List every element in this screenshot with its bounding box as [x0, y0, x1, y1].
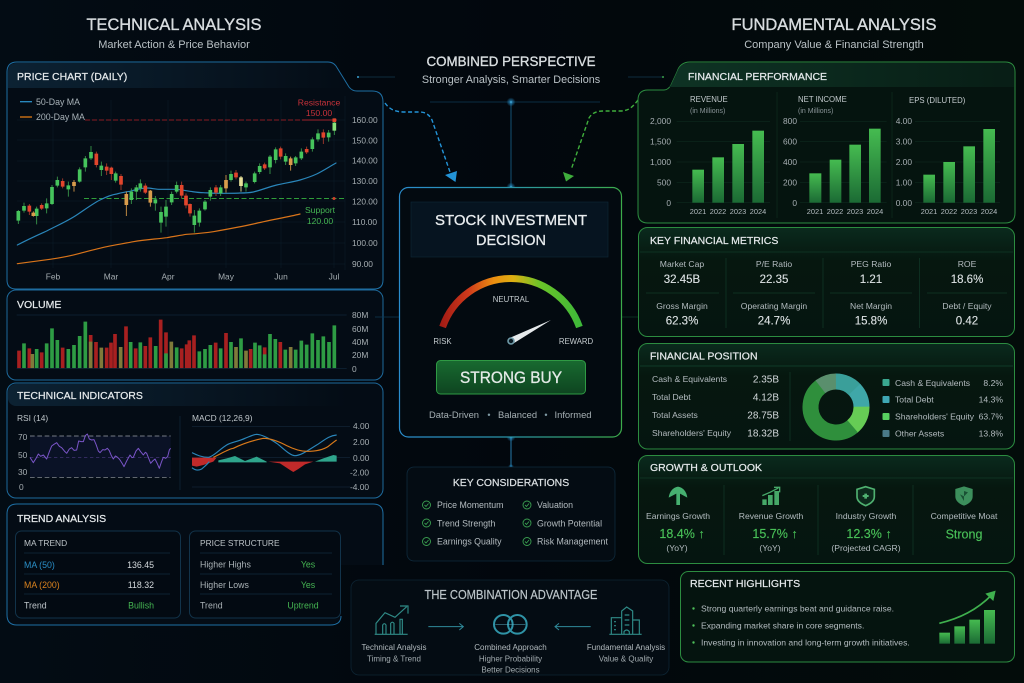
- y axis labels: 100.00: [352, 238, 378, 248]
- rsi chart: 0: [19, 482, 24, 492]
- macd chart: -4.00: [350, 482, 369, 492]
- icon: technical analysis: [375, 606, 408, 634]
- chart: revenue: REVENUE: [690, 95, 728, 104]
- chart: net income: 200: [783, 178, 797, 188]
- panel: key financial metrics: [638, 228, 1014, 336]
- arrow: fundamental to decision: [563, 100, 638, 182]
- metric: earnings growth: Earnings Growth: [646, 511, 710, 521]
- table: ma trend: MA (200): [24, 580, 60, 590]
- chart: eps: EPS (DILUTED): [909, 96, 966, 105]
- metric: industry growth: (Projected CAGR): [831, 543, 901, 553]
- table: ma trend: [16, 531, 180, 618]
- panel: financial performance: [638, 62, 1015, 223]
- balance table: [652, 372, 790, 441]
- macd chart: MACD (12,26,9): [192, 413, 253, 423]
- balance table: 28.75B: [747, 410, 779, 422]
- metrics grid: Market Cap: [660, 259, 704, 269]
- captions: Combined Approach: [474, 643, 547, 652]
- metric: revenue growth: Revenue Growth: [739, 511, 803, 521]
- captions: [362, 643, 665, 674]
- arrow: technical to decision: [385, 103, 457, 182]
- metrics grid: [656, 259, 992, 328]
- x axis labels: [46, 272, 339, 282]
- resistance line: Resistance: [298, 98, 340, 108]
- metric: industry growth: [831, 511, 901, 553]
- macd chart: 0.00: [353, 453, 370, 463]
- heading: recent highlights: RECENT HIGHLIGHTS: [690, 578, 800, 590]
- metric: industry growth: 12.3% ↑: [846, 527, 892, 541]
- captions: Better Decisions: [481, 666, 540, 674]
- title: technical analysis: [86, 15, 262, 51]
- metrics grid: 0.42: [956, 316, 978, 328]
- metric: revenue growth: (YoY): [759, 543, 781, 553]
- chart: net income: 600: [783, 136, 797, 146]
- icon: earnings growth: [669, 487, 687, 505]
- icon: growth bars and arrow: [939, 591, 996, 644]
- macd chart: 2.00: [353, 437, 370, 447]
- x axis labels: Jul: [329, 272, 339, 282]
- support line: Support: [305, 205, 336, 215]
- donut legend: Cash & Equivalents: [895, 378, 970, 388]
- metric: competitive moat: Competitive Moat: [931, 511, 998, 521]
- macd chart: 4.00: [353, 421, 370, 431]
- table: price structure: [190, 531, 340, 618]
- captions: Value & Quality: [599, 654, 653, 664]
- y axis labels: 160.00: [352, 115, 378, 125]
- metrics grid: Gross Margin: [656, 301, 708, 311]
- chart: revenue: 0: [666, 198, 671, 208]
- metrics grid: 62.3%: [666, 316, 698, 328]
- arrow: fundamental to combined: [555, 623, 591, 630]
- chart: revenue: 2022: [710, 207, 726, 216]
- panel: growth and outlook: [638, 456, 1014, 564]
- gauge: [433, 279, 594, 346]
- tagline: [429, 409, 592, 420]
- resistance line: 150.00: [306, 108, 332, 118]
- icon: fundamental analysis: [609, 607, 642, 634]
- balance table: Cash & Equivalents: [652, 374, 727, 384]
- legend: 50-Day MA: [36, 97, 80, 107]
- chart: eps: 4.00: [896, 116, 912, 126]
- volume axis: 80M: [352, 310, 368, 320]
- captions: Fundamental Analysis: [587, 643, 665, 652]
- metrics grid: Debt / Equity: [942, 301, 992, 311]
- donut legend: 14.3%: [979, 394, 1003, 404]
- y axis labels: 140.00: [352, 156, 378, 166]
- x axis labels: Feb: [46, 272, 61, 282]
- chart: revenue: (in Millions): [690, 108, 725, 115]
- table: price structure: Higher Lows: [200, 580, 249, 590]
- panel: the combination advantage: [351, 580, 669, 675]
- bullet list: [692, 604, 910, 648]
- heading: growth and outlook: GROWTH & OUTLOOK: [650, 462, 762, 474]
- balance table: 4.12B: [753, 392, 779, 404]
- metrics grid: PEG Ratio: [851, 259, 892, 269]
- y axis labels: 120.00: [352, 196, 378, 206]
- heading: stock investment decision: DECISION: [476, 232, 546, 249]
- title: technical analysis: TECHNICAL ANALYSIS: [86, 15, 262, 34]
- checklist: Valuation: [537, 500, 573, 510]
- captions: Technical Analysis: [362, 643, 426, 652]
- checklist: Earnings Quality: [437, 536, 502, 546]
- chart: revenue: 2023: [730, 207, 746, 216]
- heading: price chart: PRICE CHART (DAILY): [17, 71, 127, 83]
- rsi chart: 70: [18, 432, 28, 442]
- panel: trend analysis: [7, 504, 383, 625]
- volume axis: [352, 310, 368, 374]
- table: price structure: Yes: [301, 560, 316, 570]
- heading: volume: VOLUME: [17, 299, 61, 311]
- table: price structure: Trend: [200, 600, 223, 610]
- chart: net income: 2024: [867, 207, 883, 216]
- x axis labels: Apr: [161, 272, 175, 282]
- volume axis: 0: [352, 364, 357, 374]
- panel: recent highlights: [680, 572, 1014, 662]
- table: ma trend: Bullish: [128, 600, 154, 610]
- balance table: 18.32B: [747, 428, 779, 440]
- center connectors: [357, 76, 664, 470]
- metric: competitive moat: [931, 511, 998, 542]
- chart: eps: [896, 96, 1000, 216]
- chart grid: [17, 96, 345, 270]
- title: fundamental analysis: Company Value & Financial Strength: [744, 39, 924, 51]
- volume axis: 20M: [352, 350, 368, 360]
- checklist: Growth Potential: [537, 518, 602, 528]
- chart: eps: 0.00: [896, 198, 912, 208]
- metrics grid: 1.21: [860, 274, 882, 286]
- bullet list: Investing in innovation and long-term growth initiatives.: [701, 638, 910, 648]
- panel: financial position: [638, 344, 1014, 449]
- metric: competitive moat: Strong: [946, 528, 982, 542]
- heading: key financial metrics: KEY FINANCIAL METRICS: [650, 235, 778, 247]
- donut legend: Shareholders' Equity: [895, 412, 975, 422]
- icon: competitive moat: [955, 486, 973, 506]
- table: price structure: Uptrend: [287, 600, 319, 610]
- bullet list: Expanding market share in core segments.: [701, 620, 864, 630]
- chart: eps: 2021: [921, 207, 937, 216]
- captions: Higher Probability: [479, 654, 542, 664]
- title: combined perspective: Stronger Analysis, Smarter Decisions: [422, 74, 601, 86]
- heading: stock investment decision: [411, 202, 608, 257]
- button: strong buy: STRONG BUY: [460, 369, 562, 387]
- metric: earnings growth: [646, 511, 710, 553]
- checklist: Risk Management: [537, 536, 608, 546]
- chart: net income: 2022: [827, 207, 843, 216]
- metrics grid: ROE: [958, 259, 977, 269]
- panel: stock investment decision: [400, 188, 622, 437]
- donut legend: [882, 378, 1003, 438]
- title: technical analysis: Market Action & Price Behavior: [98, 39, 250, 51]
- gauge: RISK: [433, 337, 452, 346]
- candlesticks: [18, 118, 334, 233]
- rsi chart: [17, 413, 171, 492]
- icon: combined approach: [494, 615, 527, 634]
- support line: [84, 197, 346, 226]
- heading: technical indicators: TECHNICAL INDICATORS: [17, 390, 143, 402]
- title: combined perspective: [422, 53, 601, 86]
- heading: stock investment decision: STOCK INVESTMENT: [435, 212, 587, 229]
- y axis labels: 150.00: [352, 135, 378, 145]
- tagline: Informed: [554, 409, 592, 420]
- metrics grid: 24.7%: [758, 316, 790, 328]
- tagline: •: [487, 410, 491, 420]
- balance table: 2.35B: [753, 374, 779, 386]
- checklist: Price Momentum: [437, 500, 503, 510]
- chart: net income: 0: [792, 198, 797, 208]
- metrics grid: 15.8%: [855, 316, 887, 328]
- volume bars: [17, 315, 347, 368]
- icon: industry growth: [857, 487, 874, 506]
- table: ma trend: 118.32: [128, 580, 154, 590]
- chart: revenue: 500: [657, 178, 671, 188]
- panel: key considerations: [407, 467, 615, 561]
- x axis labels: May: [218, 272, 235, 282]
- chart: net income: 400: [783, 157, 797, 167]
- donut chart: [800, 371, 872, 443]
- table: price structure: Yes: [301, 580, 316, 590]
- icon: revenue growth: [762, 487, 780, 505]
- chart: revenue: 1,000: [650, 157, 671, 167]
- chart: eps: 3.00: [896, 136, 912, 146]
- metrics grid: 32.45B: [664, 274, 701, 286]
- chart: eps: 2022: [941, 207, 957, 216]
- bullet list: Strong quarterly earnings beat and guidance raise.: [701, 604, 894, 614]
- chart: net income: (in Millions): [798, 108, 833, 115]
- tagline: •: [544, 410, 548, 420]
- panel: technical indicators: [7, 383, 383, 498]
- table: price structure: PRICE STRUCTURE: [200, 538, 280, 548]
- table: ma trend: MA TREND: [24, 538, 67, 548]
- donut legend: 63.7%: [979, 412, 1003, 422]
- metrics grid: Operating Margin: [741, 301, 807, 311]
- tagline: Balanced: [498, 409, 537, 420]
- metric: earnings growth: (YoY): [666, 543, 688, 553]
- button: strong buy: [436, 360, 586, 394]
- heading: trend analysis: TREND ANALYSIS: [17, 513, 106, 525]
- x axis labels: Mar: [104, 272, 118, 282]
- gauge: NEUTRAL: [493, 295, 530, 304]
- tagline: Data-Driven: [429, 409, 479, 420]
- balance table: Shareholders' Equity: [652, 428, 732, 438]
- panel: price chart: [7, 62, 383, 289]
- donut legend: Total Debt: [895, 394, 934, 404]
- chart: revenue: 2024: [750, 207, 766, 216]
- metric: revenue growth: 15.7% ↑: [752, 527, 798, 541]
- title: fundamental analysis: FUNDAMENTAL ANALYSIS: [732, 15, 936, 34]
- metrics grid: 18.6%: [951, 274, 983, 286]
- chart: net income: 2021: [807, 207, 823, 216]
- volume axis: 40M: [352, 337, 368, 347]
- chart: net income: [783, 95, 887, 216]
- metrics grid: Net Margin: [850, 301, 892, 311]
- metric: industry growth: Industry Growth: [836, 511, 897, 521]
- chart: revenue: 2021: [690, 207, 706, 216]
- macd chart: -2.00: [350, 468, 369, 478]
- heading: financial performance: FINANCIAL PERFORMANCE: [688, 71, 827, 83]
- captions: Timing & Trend: [367, 654, 421, 664]
- y axis labels: [352, 115, 378, 269]
- table: ma trend: 136.45: [127, 560, 154, 570]
- rsi chart: RSI (14): [17, 413, 48, 423]
- title: fundamental analysis: [732, 15, 936, 51]
- balance table: Total Debt: [652, 392, 691, 402]
- metric: revenue growth: [739, 511, 803, 553]
- rsi chart: 30: [18, 467, 28, 477]
- chart: eps: 2023: [961, 207, 977, 216]
- macd chart: [180, 413, 370, 492]
- balance table: Total Assets: [652, 410, 698, 420]
- metrics grid: 22.35: [760, 274, 788, 286]
- legend: [20, 97, 85, 122]
- heading: combination advantage: THE COMBINATION ADVANTAGE: [424, 588, 598, 602]
- donut legend: 13.8%: [979, 428, 1003, 438]
- chart: eps: 2.00: [896, 157, 912, 167]
- y axis labels: 130.00: [352, 176, 378, 186]
- chart: net income: NET INCOME: [798, 95, 847, 104]
- chart: revenue: 1,500: [650, 136, 671, 146]
- table: ma trend: MA (50): [24, 560, 55, 570]
- metric: earnings growth: 18.4% ↑: [659, 527, 705, 541]
- table: price structure: Higher Highs: [200, 560, 251, 570]
- resistance line: [85, 98, 340, 120]
- gauge: REWARD: [559, 337, 594, 346]
- legend: 200-Day MA: [36, 112, 85, 122]
- title: combined perspective: COMBINED PERSPECTIVE: [426, 53, 596, 69]
- support line: 120.00: [307, 216, 333, 226]
- panel: volume: [7, 290, 383, 380]
- chart: net income: 800: [783, 116, 797, 126]
- heading: financial position: FINANCIAL POSITION: [650, 350, 758, 362]
- chart: eps: 1.00: [896, 178, 912, 188]
- table: ma trend: Trend: [24, 600, 47, 610]
- chart: net income: 2023: [847, 207, 863, 216]
- moving averages: [17, 163, 336, 264]
- volume axis: 60M: [352, 324, 368, 334]
- metrics grid: P/E Ratio: [756, 259, 792, 269]
- donut legend: 8.2%: [983, 378, 1003, 388]
- x axis labels: Jun: [274, 272, 288, 282]
- donut legend: Other Assets: [895, 428, 944, 438]
- arrow: technical to combined: [428, 623, 463, 630]
- checklist: [422, 500, 608, 546]
- y axis labels: 90.00: [352, 259, 373, 269]
- chart: revenue: [650, 95, 770, 216]
- y axis labels: 110.00: [352, 217, 377, 227]
- chart: eps: 2024: [981, 207, 997, 216]
- checklist: Trend Strength: [437, 518, 495, 528]
- chart: revenue: 2,000: [650, 116, 671, 126]
- rsi chart: 50: [18, 450, 28, 460]
- heading: key considerations: KEY CONSIDERATIONS: [453, 478, 569, 489]
